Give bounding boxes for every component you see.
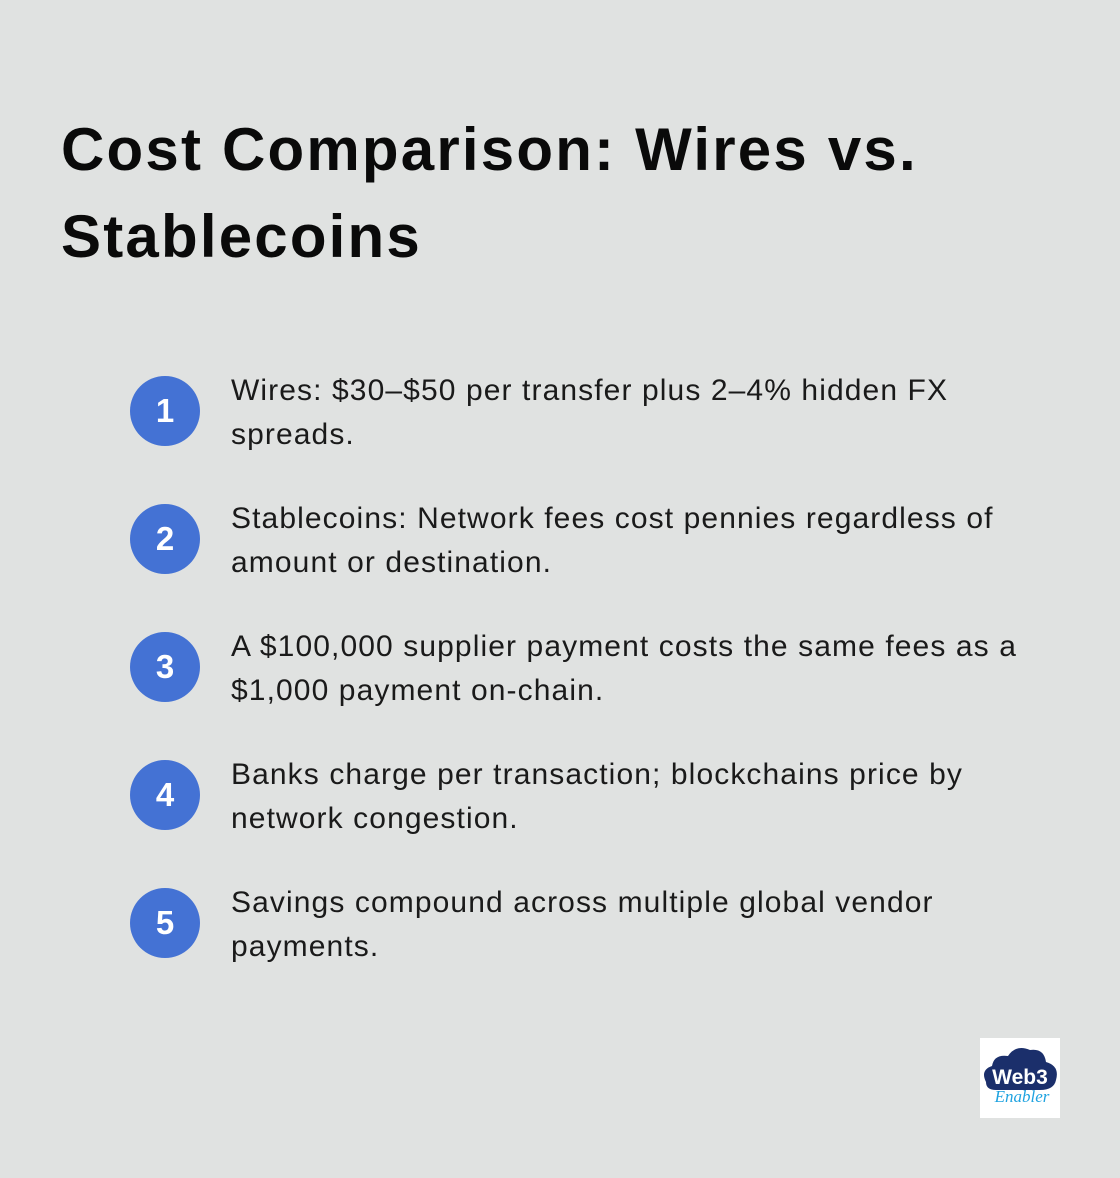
item 2: Stablecoins: Network fees cost pennies regardless of bbox=[231, 502, 994, 535]
item 2 bbox=[130, 502, 994, 579]
logo: Enabler bbox=[994, 1087, 1050, 1106]
item 4: 4 bbox=[156, 776, 174, 813]
title: Stablecoins bbox=[61, 203, 422, 270]
logo: Web3 bbox=[992, 1066, 1048, 1089]
logo bbox=[980, 1038, 1060, 1118]
item 1 bbox=[130, 374, 948, 451]
item 3: A $100,000 supplier payment costs the same fees as a bbox=[231, 630, 1017, 663]
item 4: Banks charge per transaction; blockchains price by bbox=[231, 758, 963, 791]
item 1: 1 bbox=[156, 392, 174, 429]
item 4 bbox=[130, 758, 963, 835]
item 5: payments. bbox=[231, 930, 379, 963]
item 2: 2 bbox=[156, 520, 174, 557]
item 3: $1,000 payment on-chain. bbox=[231, 674, 604, 707]
item 5: 5 bbox=[156, 904, 174, 941]
title bbox=[61, 116, 918, 270]
item 1: Wires: $30–$50 per transfer plus 2–4% hidden FX bbox=[231, 374, 948, 407]
item 2: amount or destination. bbox=[231, 546, 552, 579]
item 4: network congestion. bbox=[231, 802, 519, 835]
item 3: 3 bbox=[156, 648, 174, 685]
item 1: spreads. bbox=[231, 418, 355, 451]
title: Cost Comparison: Wires vs. bbox=[61, 116, 918, 183]
item 3 bbox=[130, 630, 1017, 707]
item 5 bbox=[130, 886, 934, 963]
item 5: Savings compound across multiple global vendor bbox=[231, 886, 934, 919]
